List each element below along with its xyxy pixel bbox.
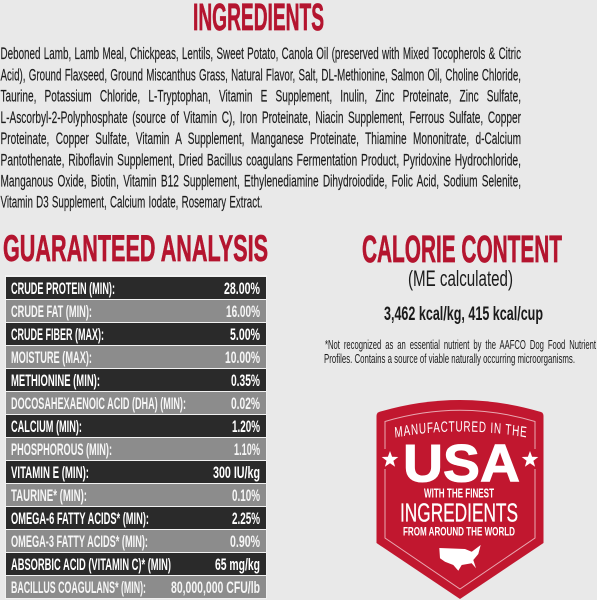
row: vitamin e: 300 IU/kg (213, 464, 260, 482)
row: dha: DOCOSAHEXAENOIC ACID (DHA) (MIN): (11, 395, 186, 413)
row: methionine: METHIONINE (MIN): (11, 372, 100, 390)
row: moisture (6, 346, 266, 368)
row: bacillus coagulans: 80,000,000 CFU/lb (171, 579, 260, 597)
row: omega-3: OMEGA-3 FATTY ACIDS* (MIN): (11, 533, 148, 551)
row: calcium (6, 415, 266, 437)
badge arc text: MANUFACTURED IN THE (394, 421, 526, 438)
row: absorbic acid: ABSORBIC ACID (VITAMIN C)* (MIN) (11, 556, 171, 574)
row: phosphorous: PHOSPHOROUS (MIN): (11, 441, 112, 459)
row: crude protein: 28.00% (224, 280, 260, 298)
row: crude fat: CRUDE FAT (MIN): (11, 303, 92, 321)
row: vitamin e (6, 461, 266, 483)
row: omega-6: OMEGA-6 FATTY ACIDS* (MIN): (11, 510, 149, 528)
row: moisture: MOISTURE (MAX): (11, 349, 92, 367)
icon: left star (382, 451, 398, 467)
row: crude fiber (6, 323, 266, 345)
row: moisture: 10.00% (225, 349, 260, 367)
row: taurine (6, 484, 266, 506)
badge text: with the finest: WITH THE FINEST (424, 486, 494, 500)
heading: guaranteed analysis: GUARANTEED ANALYSIS (3, 228, 268, 269)
row: omega-3: 0.90% (230, 533, 260, 551)
row: crude fat (6, 300, 266, 322)
row: calcium: 1.20% (232, 418, 260, 436)
row: bacillus coagulans: BACILLUS COAGULANS* (MIN): (11, 579, 146, 597)
badge usa text: USA (403, 434, 520, 494)
row: omega-6: 2.25% (232, 510, 260, 528)
badge inner line (385, 410, 535, 589)
text block: ingredients list (0, 44, 521, 212)
table: guaranteed analysis (5, 275, 267, 599)
row: taurine: TAURINE* (MIN): (11, 487, 87, 505)
row: crude protein: CRUDE PROTEIN (MIN): (11, 280, 115, 298)
row: crude protein (6, 277, 266, 299)
row: vitamin e: VITAMIN E (MIN): (11, 464, 89, 482)
icon: right star (522, 451, 538, 467)
row: crude fat: 16.00% (226, 303, 260, 321)
icon: usa map (439, 545, 481, 571)
row: crude fiber: 5.00% (230, 326, 260, 344)
row: methionine (6, 369, 266, 391)
text: me calculated: (ME calculated) (408, 266, 513, 291)
badge shield (376, 400, 544, 599)
text block: ingredients list: Vitamin D3 Supplement, Calcium Iodate, Rosemary Extract. (0, 192, 262, 212)
row: dha (6, 392, 266, 414)
text: footnote (324, 338, 596, 366)
row: taurine: 0.10% (232, 487, 260, 505)
row: calcium: CALCIUM (MIN): (11, 418, 82, 436)
row: methionine: 0.35% (231, 372, 260, 390)
badge: manufactured in the usa (376, 400, 544, 599)
row: phosphorous: 1.10% (234, 441, 260, 459)
row: phosphorous (6, 438, 266, 460)
row: crude fiber: CRUDE FIBER (MAX): (11, 326, 104, 344)
row: dha: 0.02% (231, 395, 260, 413)
badge text: ingredients: INGREDIENTS (400, 498, 518, 528)
badge text: from around the world: FROM AROUND THE WORLD (403, 524, 515, 538)
row: absorbic acid: 65 mg/kg (215, 556, 260, 574)
